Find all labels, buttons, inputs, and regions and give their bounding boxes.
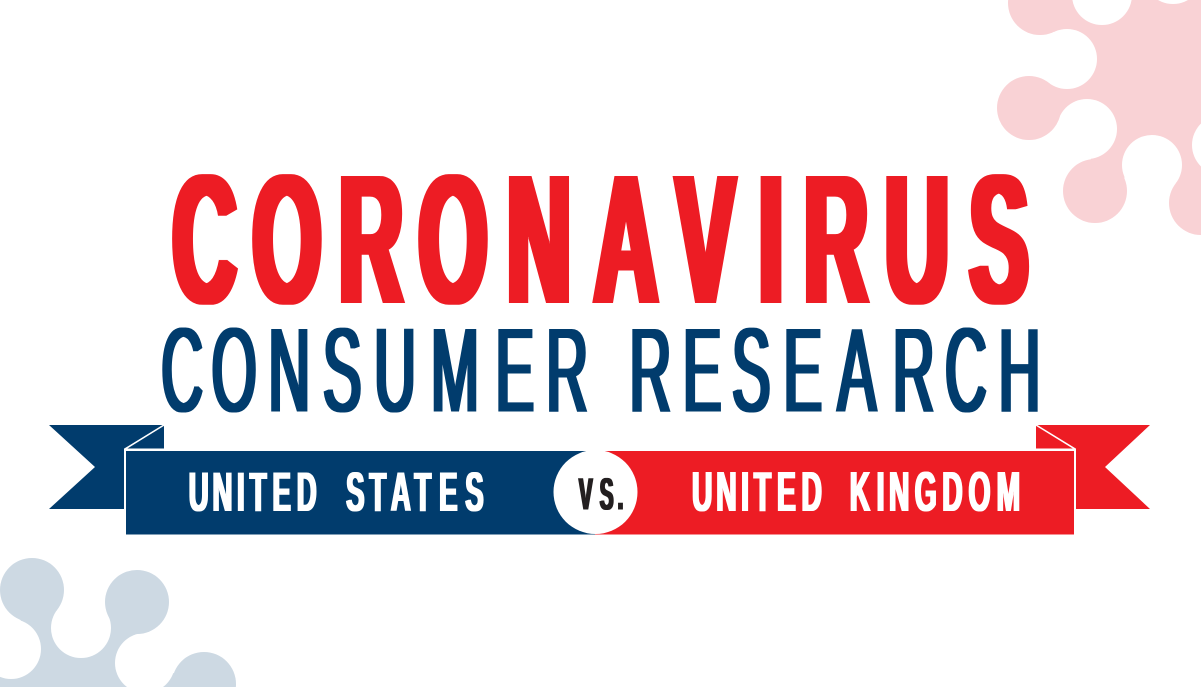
label: United States: UNITED STATES [189, 463, 484, 524]
ribbon band: red half [595, 451, 1074, 534]
icon: pink virus top right [997, 0, 1201, 235]
label: vs.: VS. [579, 468, 623, 520]
label: United Kingdom: UNITED KINGDOM [692, 462, 1020, 524]
ribbon band: blue half [126, 451, 596, 534]
ribbon tail: right red [1036, 425, 1150, 510]
title: Coronavirus: CORONAVIRUS [172, 136, 1029, 343]
subtitle: Consumer Research: CONSUMER RESEARCH [161, 303, 1040, 437]
ribbon banner [49, 425, 1150, 534]
ribbon tail: left blue [49, 425, 164, 510]
versus circle [554, 450, 638, 534]
icon: blue virus bottom left [0, 558, 236, 687]
